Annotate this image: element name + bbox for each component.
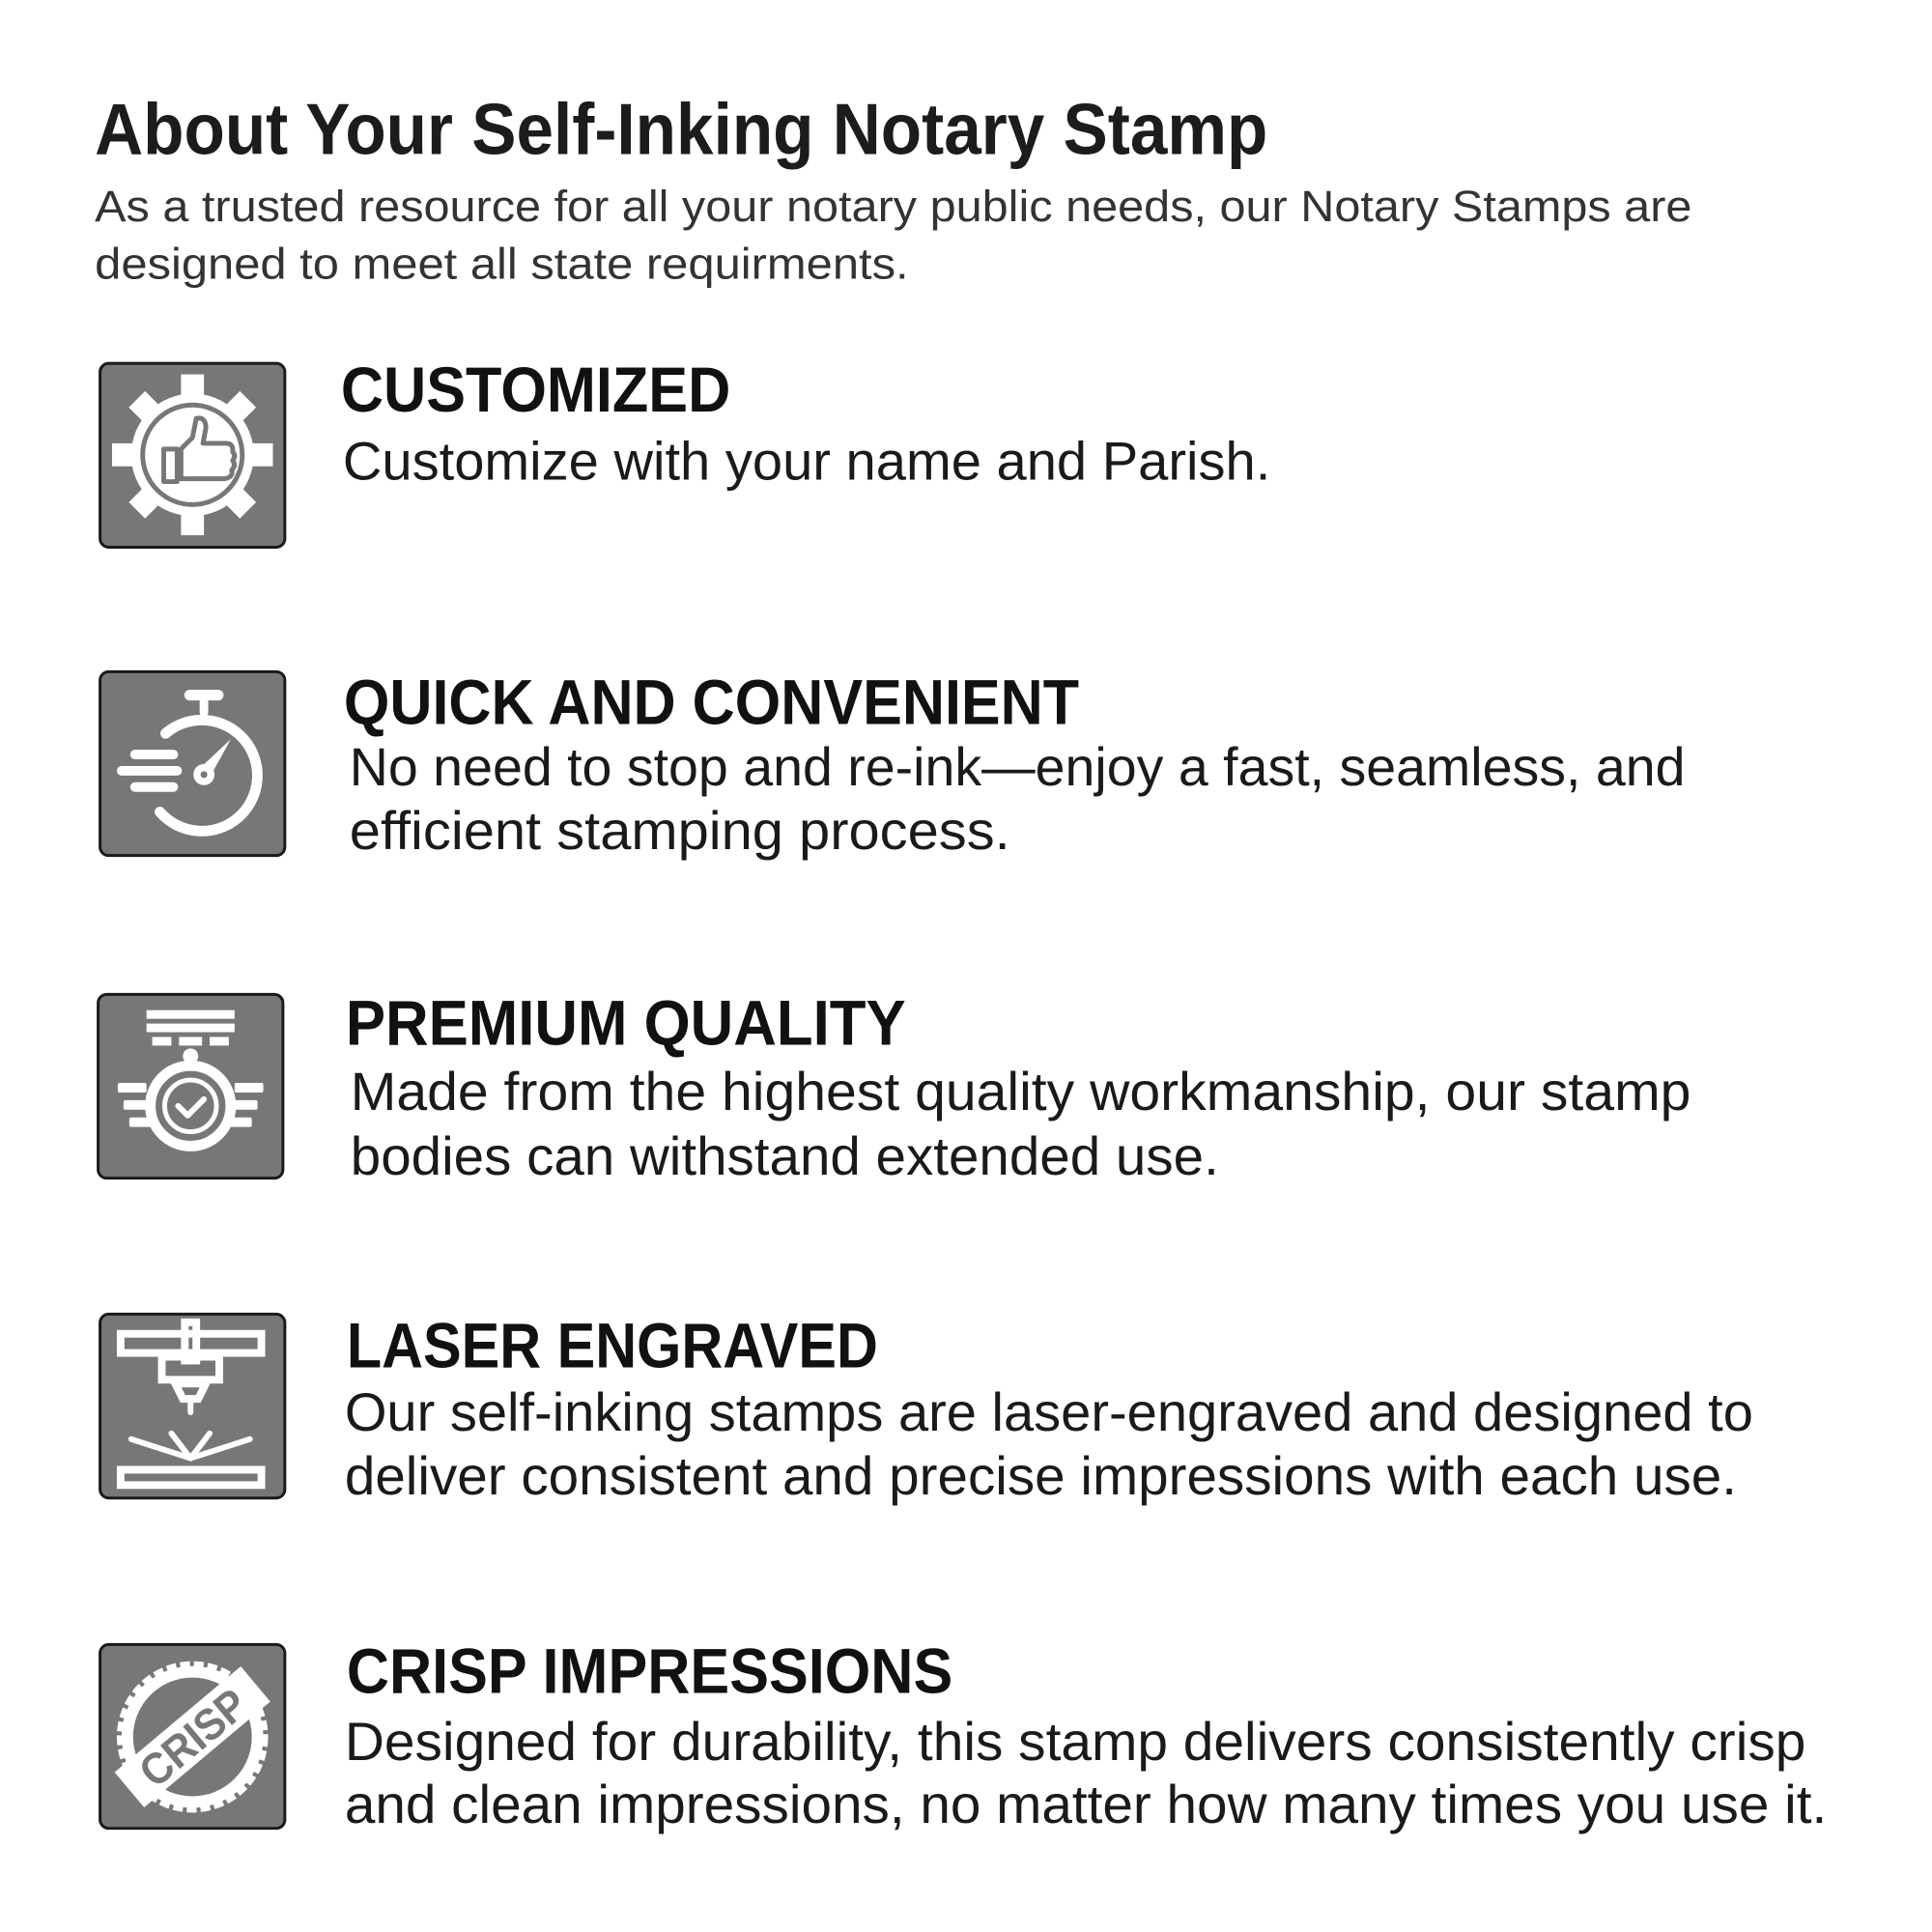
panel: customized xyxy=(81,344,1270,566)
text: premium description xyxy=(351,1062,1690,1186)
icon: gear thumbs up xyxy=(81,344,303,566)
heading: customized: CUSTOMIZED xyxy=(341,355,730,425)
heading: quick and convenient: QUICK AND CONVENIENT xyxy=(344,667,1079,737)
text: quick description: efficient stamping process. xyxy=(350,801,1010,861)
text: crisp description xyxy=(345,1712,1827,1834)
heading: laser engraved: LASER ENGRAVED xyxy=(347,1310,878,1380)
subtitle: designed to meet all state requirments. xyxy=(95,239,909,288)
text: laser description: deliver consistent and precise impressions with each use. xyxy=(345,1446,1737,1506)
text: crisp description: Designed for durability, this stamp delivers consistently crisp xyxy=(345,1712,1805,1772)
heading: premium quality: PREMIUM QUALITY xyxy=(346,987,906,1058)
text: premium description: Made from the highest quality workmanship, our stamp xyxy=(351,1062,1690,1122)
subtitle xyxy=(95,182,1691,288)
text: quick description: No need to stop and re-ink—enjoy a fast, seamless, and xyxy=(350,737,1686,797)
icon: crisp seal: CRISP xyxy=(129,1679,257,1797)
icon: crisp seal xyxy=(100,1644,285,1829)
text: laser description: Our self-inking stamps are laser-engraved and designed to xyxy=(345,1382,1753,1442)
text: quick description xyxy=(350,737,1686,861)
text: premium description: bodies can withstand extended use. xyxy=(351,1126,1219,1186)
text: laser description xyxy=(345,1382,1753,1506)
text: customized description: Customize with your name and Parish. xyxy=(343,432,1270,492)
panel: crisp impressions xyxy=(100,1635,1827,1834)
text: crisp description: and clean impressions, no matter how many times you use it. xyxy=(345,1775,1827,1834)
icon: stopwatch xyxy=(100,671,285,856)
icon: medal xyxy=(99,994,283,1179)
icon: laser engraver xyxy=(100,1314,285,1498)
title: About Your Self-Inking Notary Stamp xyxy=(95,89,1267,170)
panel: premium quality xyxy=(99,987,1690,1186)
panel: quick and convenient xyxy=(100,667,1686,861)
panel: laser engraved xyxy=(100,1310,1753,1506)
heading: crisp impressions: CRISP IMPRESSIONS xyxy=(347,1635,952,1706)
subtitle: As a trusted resource for all your notary public needs, our Notary Stamps are xyxy=(95,182,1691,231)
